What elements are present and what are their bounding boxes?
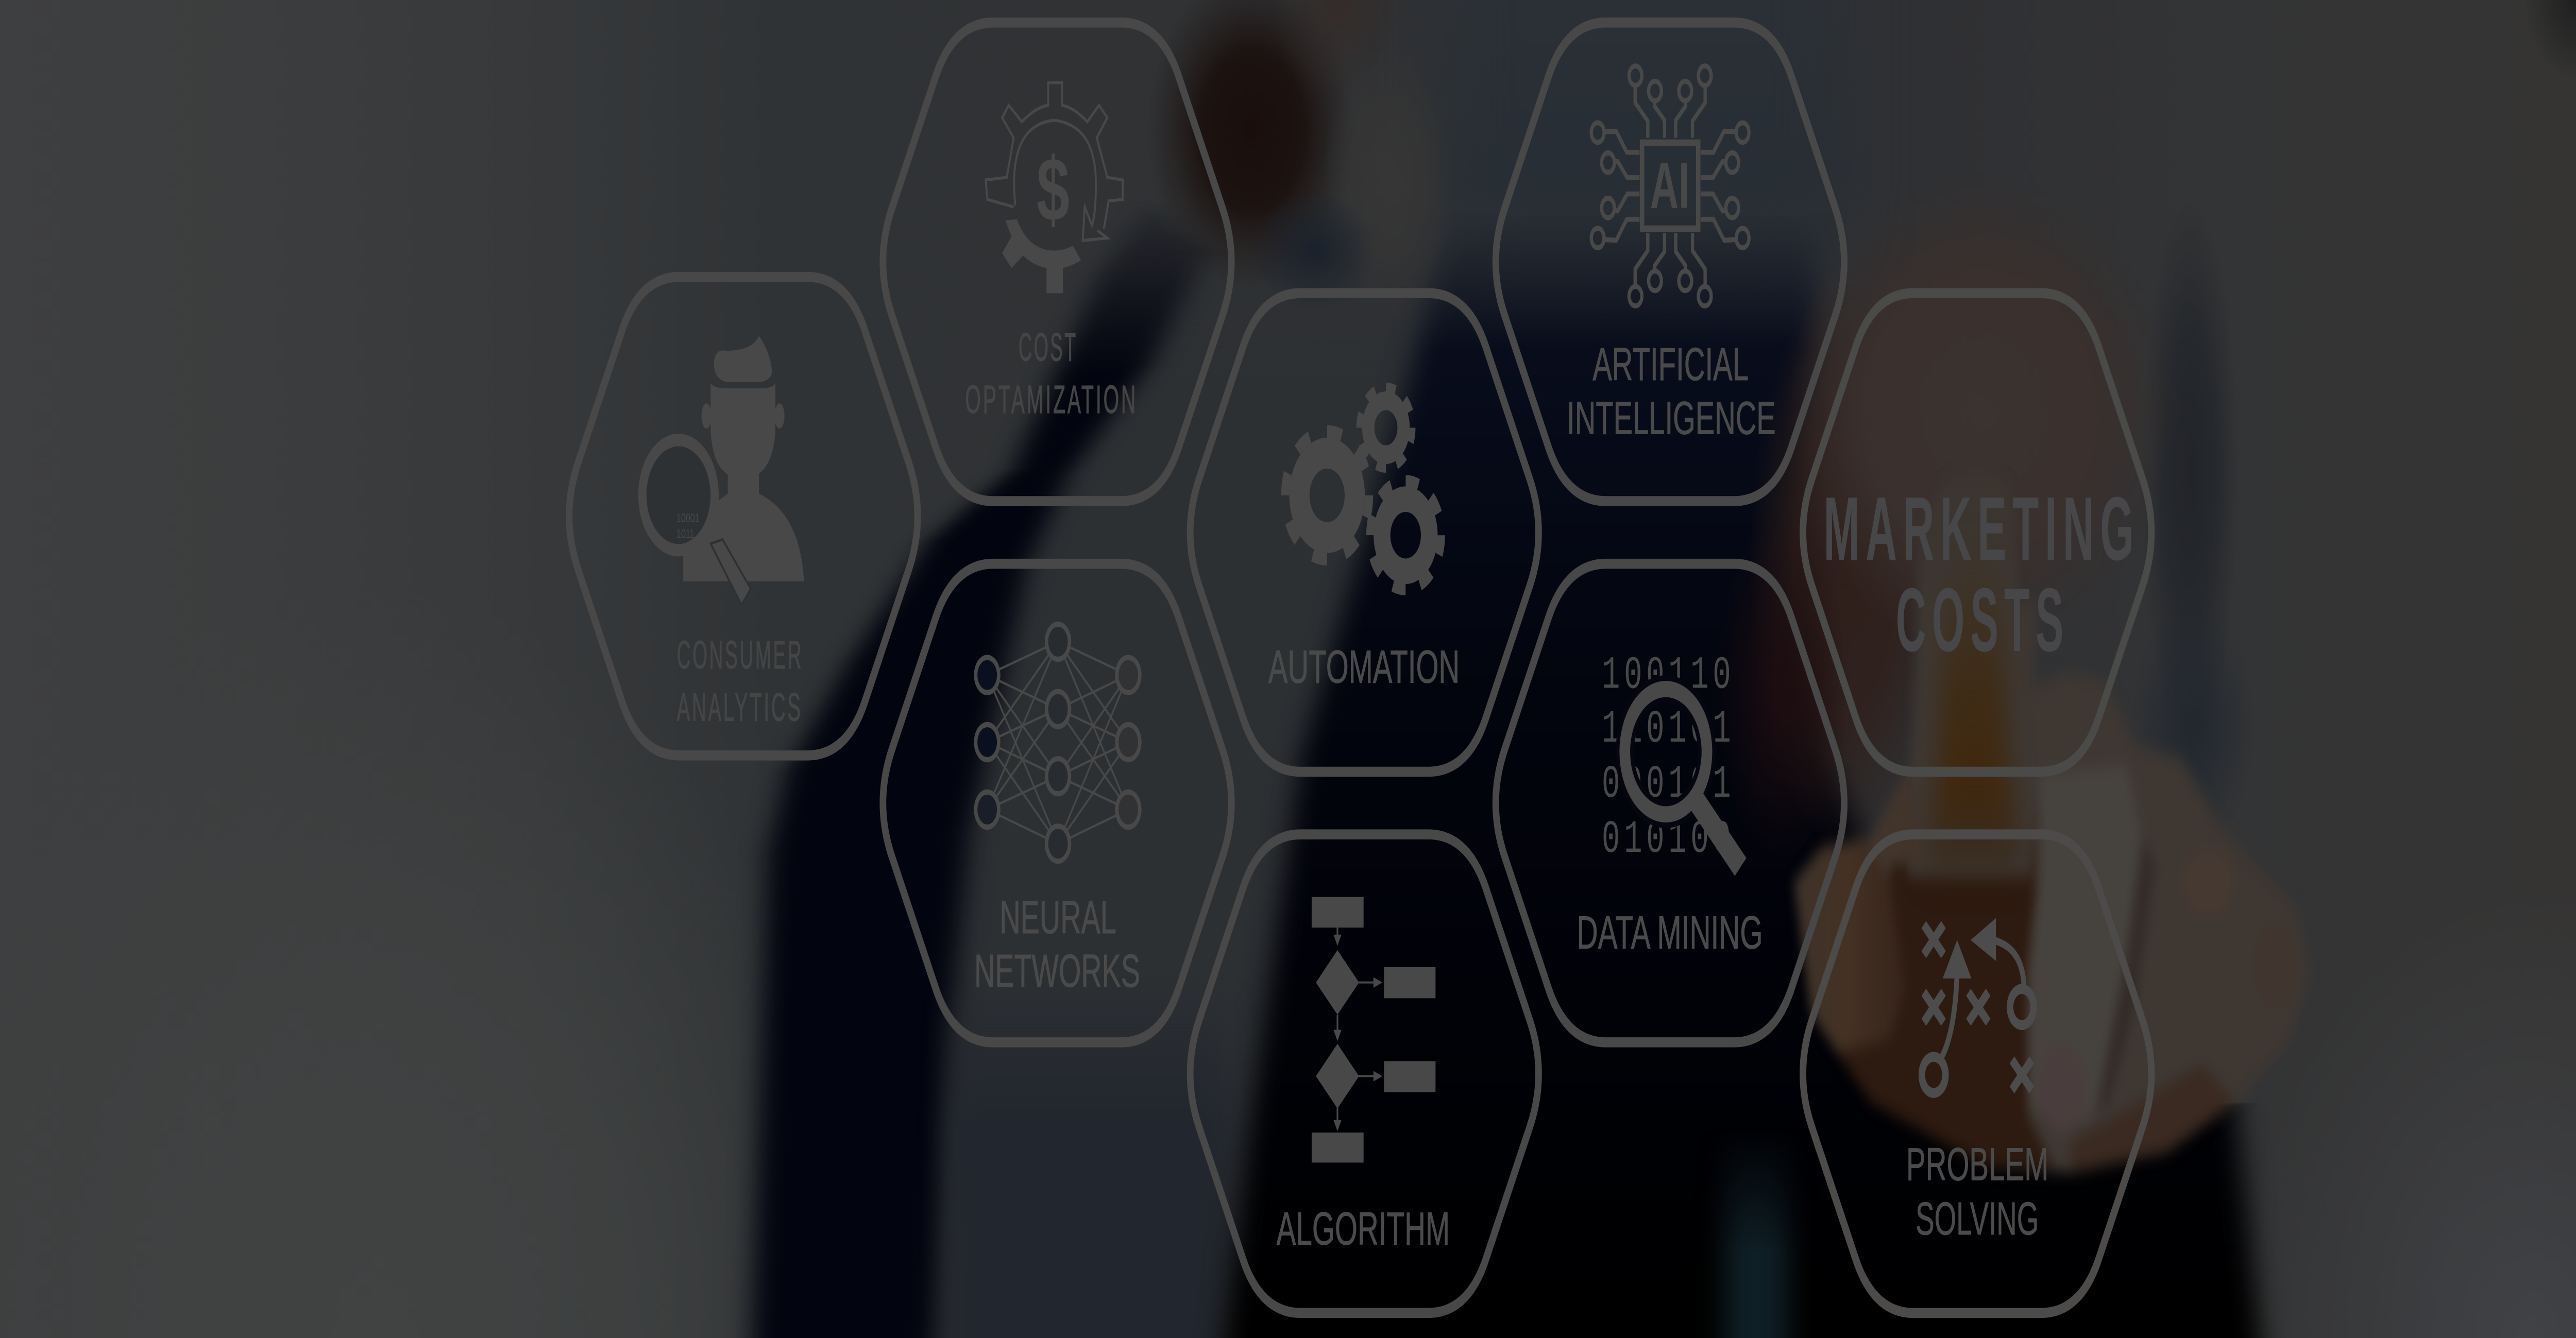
- label: algorithm: ALGORITHM: [1277, 1203, 1450, 1255]
- background: lower jacket navy: [950, 977, 1229, 1338]
- hexagon: problem solving: [1803, 834, 2151, 1313]
- icon: strategy play diagram: [1922, 918, 2033, 1093]
- hexagon: algorithm: [1190, 834, 1538, 1313]
- label: analytics: ANALYTICS: [677, 685, 803, 729]
- icon: analyst with magnifier: [642, 336, 804, 605]
- label: optamization: OPTAMIZATION: [965, 377, 1138, 421]
- title: costs: COSTS: [1896, 570, 2070, 671]
- background: brown forearm glow: [1750, 276, 1947, 852]
- hexagon: data mining: [1496, 564, 1844, 1042]
- background: jacket grey area: [920, 251, 1462, 1338]
- hexagon: neural networks: [883, 564, 1231, 1042]
- icon: binary digits under magnifier: 110101: [1602, 704, 1731, 756]
- background: head and hair: [1147, 0, 1360, 290]
- icon: analyst with magnifier: 10001: [676, 511, 699, 525]
- label: consumer: CONSUMER: [677, 632, 803, 677]
- label: intelligence: INTELLIGENCE: [1567, 392, 1776, 444]
- label: solving: SOLVING: [1916, 1193, 2039, 1245]
- hexagon: cost optimization: [883, 23, 1231, 501]
- icon: analyst with magnifier: 10: [676, 543, 686, 557]
- icon: gear with dollar sign: $: [1037, 140, 1070, 240]
- label: networks: NETWORKS: [974, 945, 1140, 997]
- background: light spot near collar: [1323, 43, 1454, 318]
- background: black suit area: [1224, 213, 2261, 1338]
- icon: binary digits under magnifier: 000101: [1602, 759, 1731, 811]
- hexagon: marketing costs (title): [1803, 293, 2151, 771]
- icon: analyst with magnifier: 1011: [676, 527, 694, 541]
- label: artificial: ARTIFICIAL: [1592, 339, 1749, 390]
- label: automation: AUTOMATION: [1268, 641, 1460, 693]
- icon: neural network: [976, 624, 1140, 861]
- label: problem: PROBLEM: [1906, 1139, 2048, 1191]
- hexagon: consumer analytics: [569, 277, 918, 756]
- background: dark lapel band: [752, 200, 1208, 1338]
- icon: binary digits under magnifier: [1602, 649, 1741, 867]
- icon: AI chip with circuit traces: AI: [1650, 149, 1689, 222]
- icon: gear with dollar sign: [986, 83, 1123, 293]
- label: data mining: DATA MINING: [1577, 907, 1763, 959]
- label: neural: NEURAL: [999, 891, 1116, 944]
- label: cost: COST: [1019, 325, 1078, 369]
- icon: three gears: [1285, 387, 1442, 590]
- background: teal patch: [1725, 1127, 1787, 1338]
- background: top navy band: [1446, 0, 1840, 301]
- icon: flowchart: [1312, 897, 1435, 1162]
- background: navy shade under collar: [1252, 191, 1377, 311]
- hexagon: automation: [1190, 293, 1538, 771]
- finger orange glow: [1925, 539, 2024, 877]
- icon: binary digits under magnifier: 010100: [1602, 814, 1731, 866]
- icon: binary digits under magnifier: 100110: [1602, 649, 1731, 702]
- hand: [1794, 471, 2310, 1173]
- icon: AI chip with circuit traces: [1591, 66, 1749, 306]
- hexagon: artificial intelligence: [1496, 23, 1844, 501]
- title: marketing: MARKETING: [1824, 479, 2140, 579]
- background: blue shade behind hand: [2141, 200, 2239, 752]
